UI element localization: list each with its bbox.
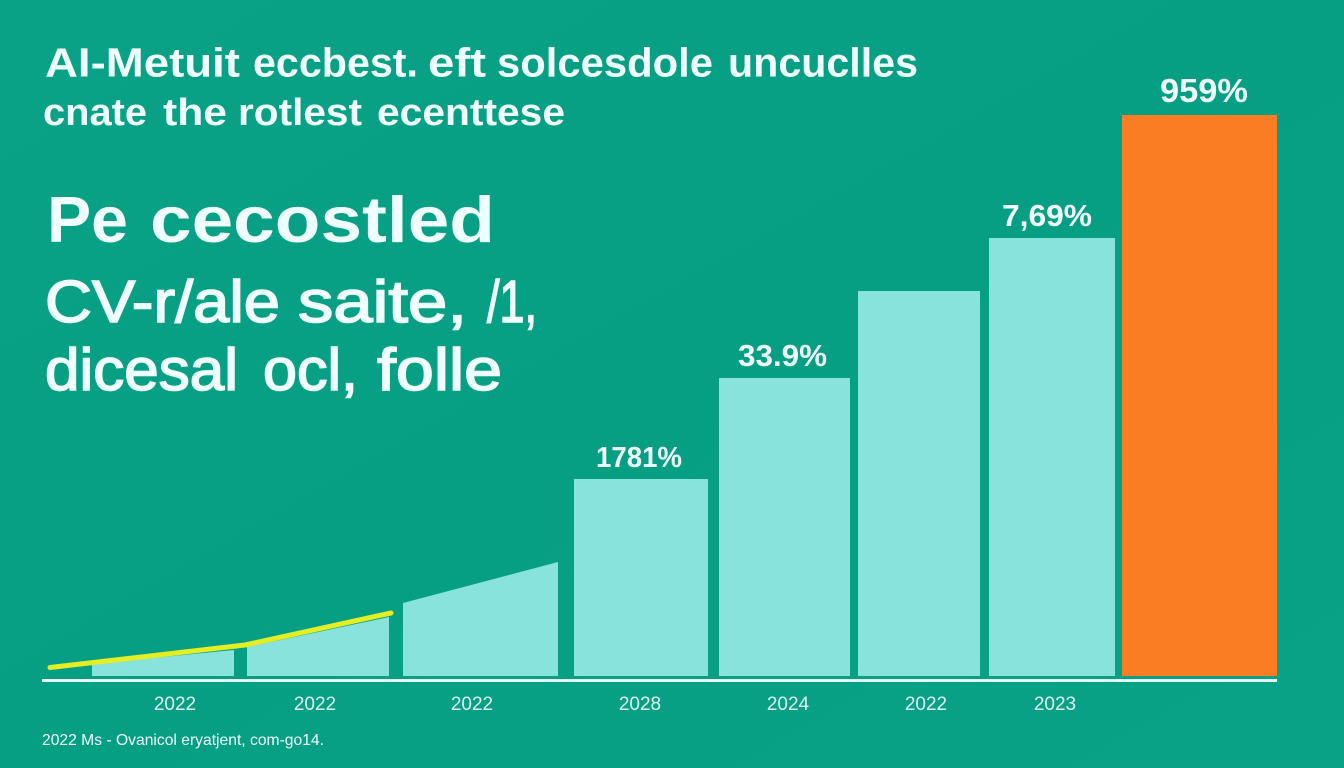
large statement text: cecostled	[150, 183, 495, 256]
large statement text: ocl,	[263, 337, 358, 403]
value labels: 7,69%	[1002, 198, 1092, 233]
title	[43, 40, 918, 134]
bar 4	[574, 479, 708, 676]
large statement text	[45, 183, 537, 403]
year labels: 2028	[619, 694, 661, 715]
value labels: 1781%	[596, 442, 682, 474]
title: cnate	[43, 92, 147, 134]
bar 5	[719, 378, 850, 676]
year labels: 2023	[1034, 694, 1076, 715]
large statement text: folle	[377, 337, 502, 403]
title: AI-Metuit	[45, 40, 240, 86]
year labels: 2022	[905, 694, 947, 715]
bar 3	[403, 562, 558, 676]
title: eft	[428, 40, 486, 86]
title: uncuclles	[728, 40, 918, 86]
title: the	[163, 92, 227, 134]
value labels: 33.9%	[738, 338, 827, 373]
title: eccbest.	[253, 40, 418, 86]
title: ecenttese	[377, 92, 565, 134]
year labels: 2024	[767, 694, 810, 715]
bar 7	[989, 238, 1115, 676]
large statement text: saite,	[298, 269, 467, 335]
title: solcesdole	[497, 40, 713, 86]
year labels: 2022	[154, 694, 196, 715]
bar 2	[247, 617, 389, 676]
large statement text: dicesal	[45, 337, 238, 403]
year labels	[154, 694, 1076, 715]
trend line	[50, 613, 391, 668]
large statement text: CV-r/ale	[45, 269, 280, 335]
bar 8 highlighted	[1122, 115, 1277, 676]
large statement text: /1,	[487, 269, 537, 335]
value labels	[596, 72, 1248, 474]
axis line	[42, 679, 1277, 682]
value labels: 959%	[1160, 72, 1248, 109]
bar 1	[92, 650, 234, 676]
title: rotlest	[238, 92, 362, 134]
bar 6	[858, 291, 980, 676]
bar chart	[42, 115, 1277, 682]
year labels: 2022	[451, 694, 493, 715]
year labels: 2022	[294, 694, 336, 715]
footer source note: 2022 Ms - Ovanicol eryatjent, com-go14.	[42, 732, 324, 749]
large statement text: Pe	[47, 183, 128, 256]
